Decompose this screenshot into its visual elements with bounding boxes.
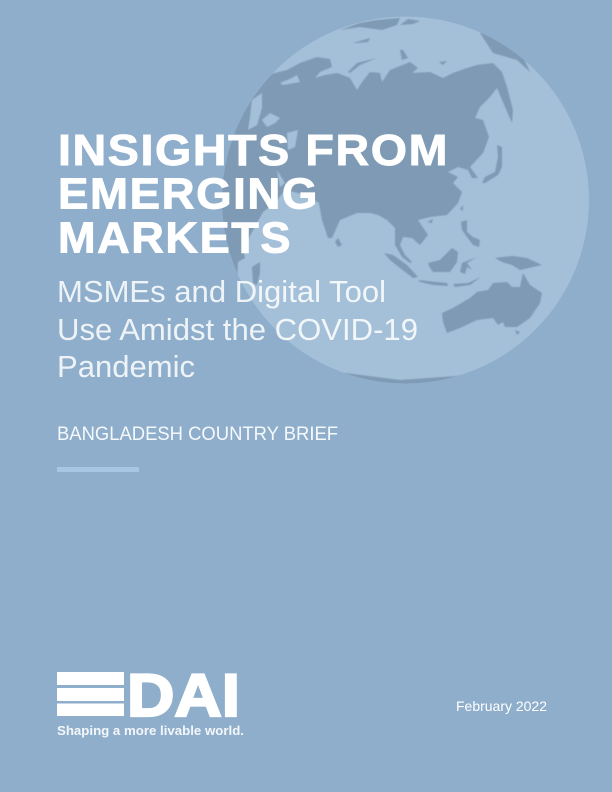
title: INSIGHTS FROM (58, 126, 449, 175)
subtitle (57, 275, 418, 384)
subtitle: Use Amidst the COVID-19 (57, 313, 418, 347)
title: MARKETS (58, 214, 292, 262)
map: Arctic islands and polar rims (340, 18, 530, 400)
subtitle: Pandemic (57, 350, 195, 384)
date: February 2022 (456, 698, 547, 714)
DAI logo (57, 662, 244, 738)
title: EMERGING (58, 170, 319, 218)
country brief label: BANGLADESH COUNTRY BRIEF (57, 423, 338, 445)
title (58, 126, 449, 262)
map: inland seas (248, 75, 300, 187)
map: Eurasia landmass (222, 56, 514, 274)
map: Australia (442, 273, 542, 335)
subtitle: MSMEs and Digital Tool (57, 275, 386, 309)
map: Indonesia, Philippines and nearby islands (252, 145, 542, 287)
accent bar (57, 467, 139, 472)
logo tagline: Shaping a more livable world. (57, 723, 244, 738)
logo stripes (57, 672, 124, 716)
globe illustration (205, 16, 589, 400)
logo wordmark: DAI (127, 662, 240, 729)
